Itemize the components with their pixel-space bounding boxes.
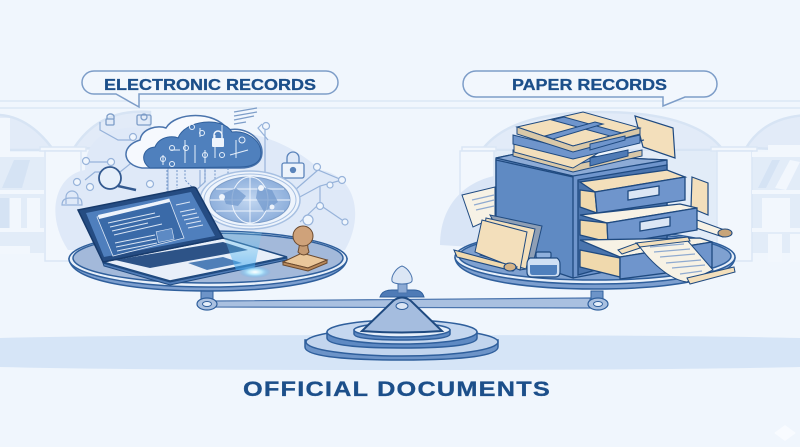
electronic records group [62, 108, 348, 285]
icon: cloud with circuits [126, 116, 262, 168]
icon: globe [200, 171, 300, 229]
beam [197, 291, 608, 310]
speech bubble: paper records [463, 71, 717, 106]
paper stack [513, 112, 644, 172]
loose sheet right [691, 177, 708, 215]
unrolled scroll document [618, 237, 735, 284]
speech bubble: electronic records: ELECTRONIC RECORDS [104, 77, 316, 94]
scale base [305, 320, 498, 360]
icon: document lines [234, 108, 257, 124]
laptop [78, 187, 287, 285]
icon: ink bottle [527, 252, 560, 277]
scroll left [454, 250, 517, 271]
icon: padlock [282, 152, 304, 178]
loose paper left [462, 187, 495, 227]
watermark corner mark [774, 425, 796, 441]
scroll right [696, 220, 732, 237]
title: OFFICIAL DOCUMENTS [243, 378, 551, 401]
paper records group [454, 112, 735, 284]
background blob: left [55, 127, 355, 250]
right pan [455, 230, 735, 289]
filing cabinet [496, 153, 712, 279]
balance scale [197, 266, 608, 360]
bottom drawer [580, 238, 712, 279]
network lines [62, 122, 348, 225]
data connectors [167, 168, 228, 192]
icon: padlock small outlines [106, 114, 151, 125]
middle drawer [580, 204, 697, 245]
loose sheet top right [635, 116, 675, 158]
background blob: right [440, 175, 520, 250]
left pan [69, 231, 347, 291]
upright folders [475, 215, 542, 270]
icon: magnifying glass [99, 167, 136, 190]
top drawer [580, 170, 685, 213]
ground band [0, 335, 800, 370]
hologram light [222, 232, 271, 278]
fulcrum [362, 266, 442, 332]
speech bubble: paper records: PAPER RECORDS [512, 77, 667, 94]
background: library architecture [0, 100, 800, 262]
icon: rubber stamp [283, 226, 327, 271]
speech bubble: electronic records [82, 71, 338, 107]
